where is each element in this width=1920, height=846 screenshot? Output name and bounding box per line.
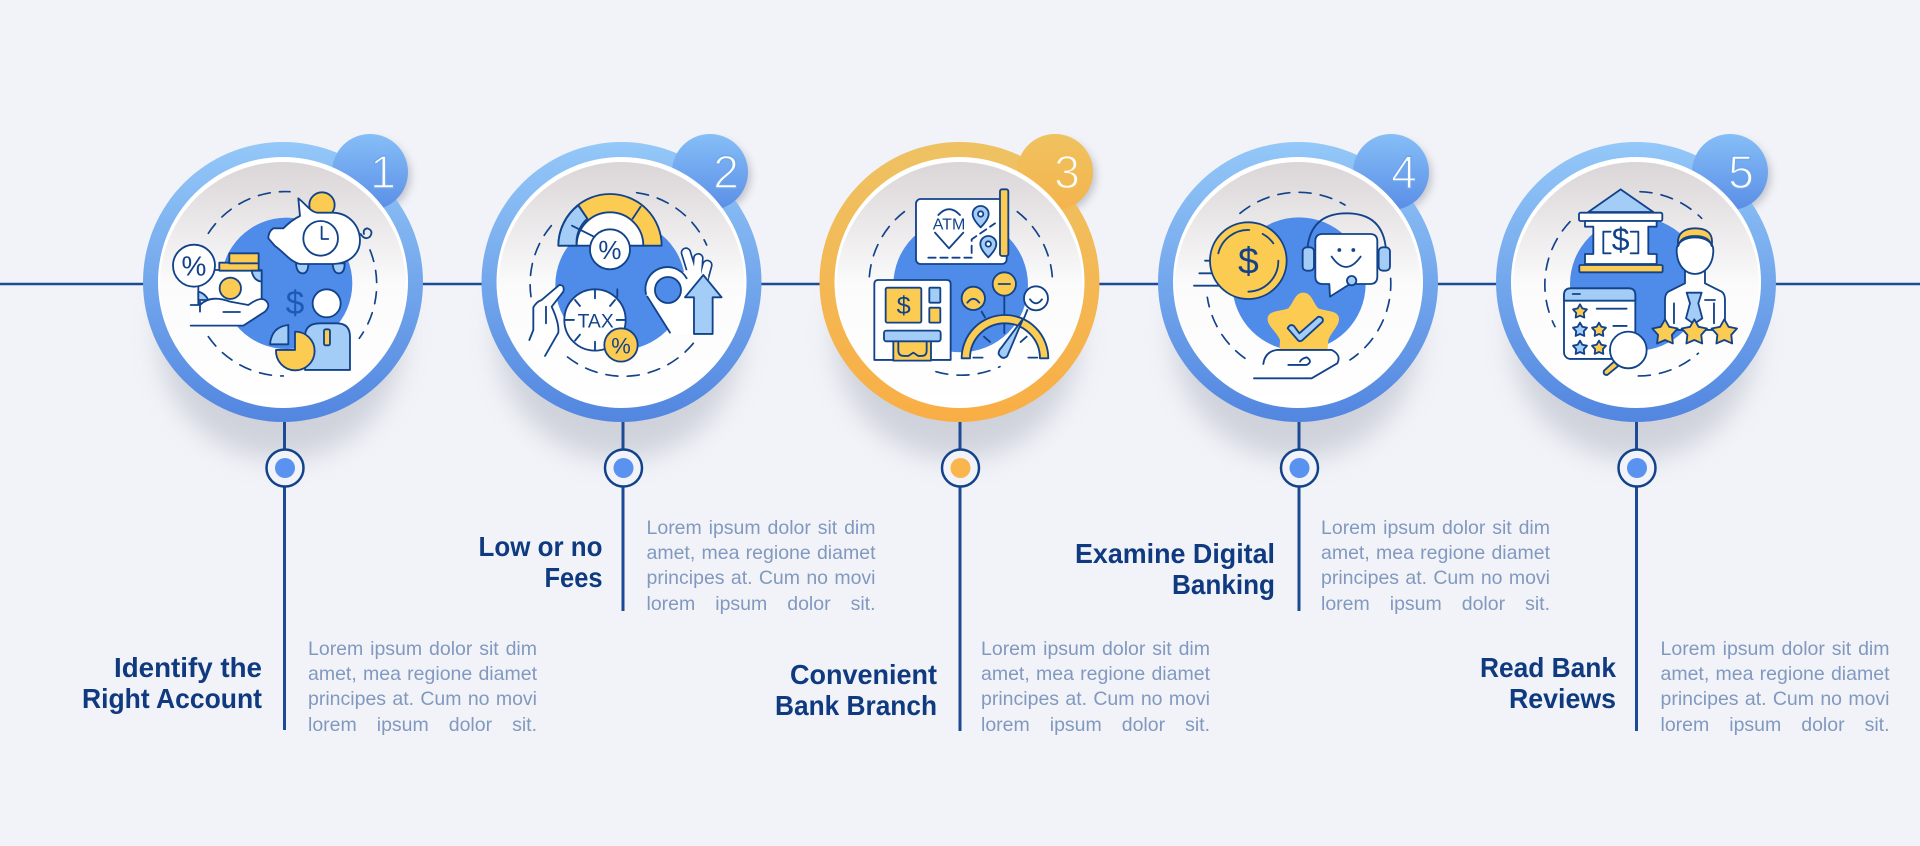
icon: low fees: % — [598, 235, 622, 265]
step 4 connector and marker — [1281, 422, 1318, 611]
icon detail: raised fingers — [686, 253, 707, 283]
heading: Read Bank Reviews: Read Bank — [1480, 652, 1616, 683]
text block: step 4 description: amet, mea regione diamet — [1321, 542, 1550, 564]
text block: step 3 description: lorem ipsum dolor sit. — [981, 714, 1210, 736]
step 3 connector and marker — [942, 422, 979, 731]
icon: ATM and branch: ATM — [933, 216, 965, 233]
text block: step 4 description — [1321, 517, 1550, 615]
icon: ATM and branch: $ — [897, 292, 911, 320]
text block: step 4 description: lorem ipsum dolor sit. — [1321, 593, 1550, 615]
text block: step 2 description: lorem ipsum dolor sit. — [646, 593, 876, 615]
number 2: 2 — [713, 146, 739, 198]
number 5: 5 — [1728, 146, 1754, 198]
text block: step 5 description: principes at. Cum no movi — [1660, 688, 1890, 710]
step 2 circle — [482, 134, 762, 459]
text block: step 2 description: Lorem ipsum dolor sit dim — [646, 517, 876, 539]
icon: digital banking — [1194, 192, 1391, 378]
text block: step 3 description: amet, mea regione diamet — [981, 663, 1210, 685]
step 5 connector and marker — [1618, 422, 1656, 731]
icon: digital banking: $ — [1238, 240, 1259, 282]
number 4: 4 — [1391, 146, 1417, 198]
number 1: 1 — [370, 146, 396, 198]
text block: step 4 description: Lorem ipsum dolor sit dim — [1321, 517, 1550, 539]
heading: Convenient Bank Branch: Convenient — [790, 659, 937, 690]
text block: step 1 description — [308, 638, 537, 736]
heading: Convenient Bank Branch: Bank Branch — [775, 690, 937, 721]
step 4 circle — [1158, 134, 1438, 459]
step 1 connector and marker — [266, 422, 304, 730]
text block: step 3 description: principes at. Cum no movi — [981, 688, 1210, 710]
icon: low fees: TAX — [578, 311, 614, 332]
icon: bank reviews: $ — [1612, 222, 1630, 258]
heading: Examine Digital Banking: Examine Digital — [1075, 538, 1275, 569]
text block: step 1 description: Lorem ipsum dolor sit dim — [308, 638, 537, 660]
heading: Examine Digital Banking: Banking — [1172, 569, 1275, 600]
text block: step 5 description: lorem ipsum dolor sit. — [1660, 714, 1890, 736]
text block: step 1 description: lorem ipsum dolor sit. — [308, 714, 537, 736]
icon: low fees: % — [611, 333, 631, 358]
text block: step 5 description — [1660, 638, 1890, 736]
text block: step 3 description: Lorem ipsum dolor sit dim — [981, 638, 1210, 660]
number 3: 3 — [1054, 146, 1080, 198]
text block: step 2 description: amet, mea regione diamet — [646, 542, 876, 564]
text block: step 5 description: Lorem ipsum dolor sit dim — [1660, 638, 1890, 660]
step 5 circle — [1496, 134, 1776, 459]
step 2 connector and marker — [605, 422, 642, 611]
heading: Read Bank Reviews: Reviews — [1509, 683, 1616, 714]
icon: account selection: $ — [286, 285, 304, 322]
heading: Identify the Right Account: Right Account — [82, 683, 262, 714]
heading: Low or no Fees: Fees — [544, 562, 602, 593]
timeline: horizontal connector — [0, 283, 1920, 285]
icon: low fees — [529, 193, 722, 376]
icon: account selection: % — [182, 251, 206, 282]
text block: step 5 description: amet, mea regione diamet — [1660, 663, 1890, 685]
heading: Identify the Right Account: Identify the — [114, 652, 262, 683]
text block: step 3 description — [981, 638, 1210, 736]
icon: bank reviews — [1545, 189, 1737, 376]
icon: account selection — [173, 192, 377, 376]
text block: step 2 description — [646, 517, 876, 615]
text block: step 4 description: principes at. Cum no movi — [1321, 567, 1550, 589]
text block: step 2 description: principes at. Cum no movi — [646, 567, 876, 589]
step 3 circle — [820, 134, 1100, 459]
icon: ATM and branch — [869, 189, 1052, 375]
text block: step 1 description: principes at. Cum no movi — [308, 688, 537, 710]
text block: step 1 description: amet, mea regione diamet — [308, 663, 537, 685]
heading: Low or no Fees: Low or no — [478, 531, 602, 562]
step 1 circle — [143, 134, 423, 459]
